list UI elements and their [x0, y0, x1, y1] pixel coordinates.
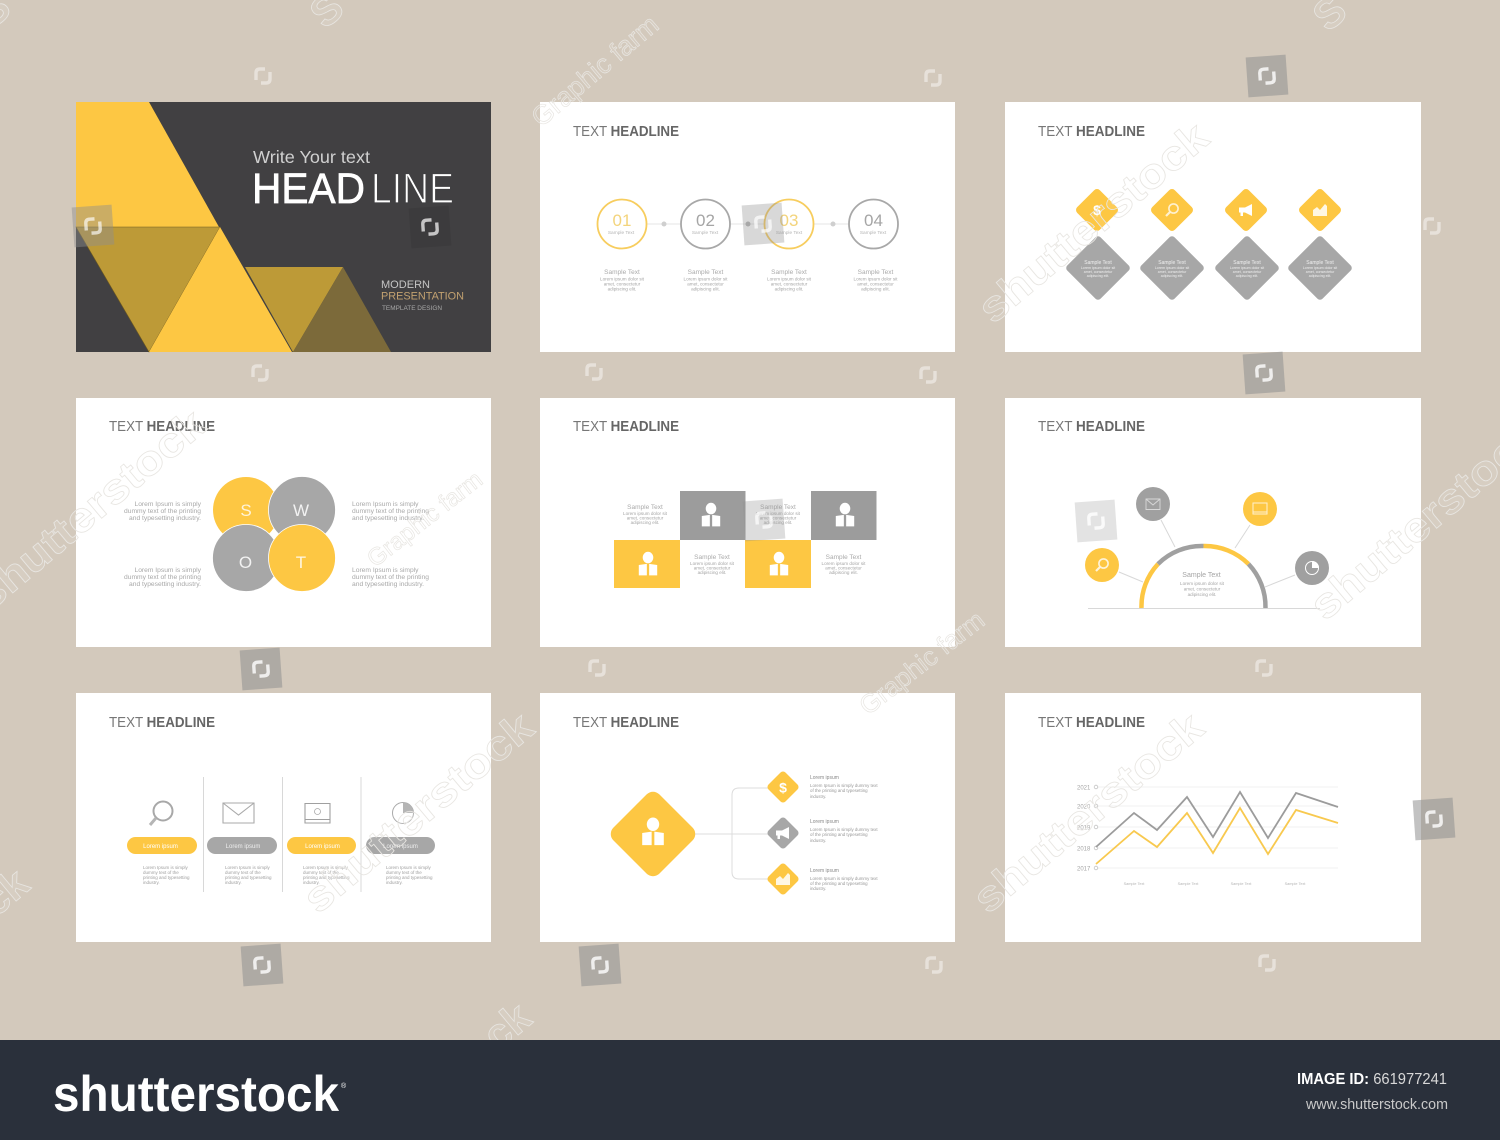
- slide: numbered steps: [540, 102, 955, 352]
- slide: SWOT: [76, 398, 491, 647]
- step 03: adipiscing elit.: [775, 286, 803, 292]
- branch 1: [766, 770, 878, 804]
- column 4: printing and typesetting: [386, 875, 433, 880]
- column 4: industry.: [386, 880, 403, 885]
- image id: IMAGE ID: 661977241: [1297, 1071, 1447, 1088]
- slide: line chart: [1005, 693, 1421, 942]
- icon: mail circle: [1136, 487, 1170, 521]
- caption 3: amet, consectetur: [694, 566, 731, 570]
- line chart: [1077, 785, 1338, 886]
- watermark wordmarks: Graphic farm: [362, 466, 488, 573]
- column 1: Lorem Ipsum is simply: [143, 865, 189, 870]
- caption 4: [822, 554, 866, 575]
- arc text: Lorem ipsum dolor sit: [1180, 581, 1225, 586]
- caption 1: adipiscing elit.: [631, 520, 659, 525]
- caption 1: amet, consectetur: [627, 516, 664, 520]
- cover headline: [252, 165, 454, 213]
- step 02: [681, 200, 730, 292]
- column 1: printing and typesetting: [143, 875, 190, 880]
- line chart: 2017: [1077, 866, 1091, 872]
- column 2: printing and typesetting: [225, 875, 272, 880]
- branch 2: industry.: [810, 838, 826, 843]
- step 02: adipiscing elit.: [691, 286, 720, 292]
- caption 4: adipiscing elit.: [829, 570, 858, 575]
- SWOT text bottom right: [352, 567, 429, 588]
- column 4: Lorem Ipsum is simply: [386, 865, 432, 870]
- branch 2: [766, 816, 878, 850]
- watermark wordmarks: shutterstock: [294, 702, 543, 922]
- watermark wordmarks: ck: [474, 992, 540, 1059]
- slide: cover: [76, 102, 491, 352]
- diamond column 3: adipiscing elit.: [1236, 274, 1258, 278]
- step 01: amet, consectetur: [604, 282, 641, 286]
- main diamond: [607, 788, 699, 880]
- column 3: Lorem ipsum: [305, 844, 340, 850]
- icon: screen circle: [1243, 492, 1277, 526]
- diamond column 2: Lorem ipsum dolor sit: [1155, 266, 1189, 270]
- step 04: Lorem ipsum dolor sit: [854, 276, 898, 282]
- line chart: 2018: [1077, 846, 1091, 852]
- column 2: [207, 803, 277, 885]
- SWOT text top left: Lorem Ipsum is simply: [134, 501, 202, 508]
- column 3: printing and typesetting: [303, 875, 350, 880]
- diamond column 4: [1287, 187, 1353, 301]
- SWOT text bottom right: Lorem Ipsum is simply: [352, 567, 419, 574]
- diamond column 4: Lorem ipsum dolor sit: [1303, 266, 1337, 270]
- diamond column 2: adipiscing elit.: [1161, 274, 1183, 278]
- site url: www.shutterstock.com: [1305, 1097, 1448, 1113]
- connector line with dots: [647, 222, 849, 226]
- column dividers: [204, 777, 361, 892]
- cover tagline: PRESENTATION: [381, 290, 464, 302]
- step 03: Sample Text: [771, 269, 807, 276]
- diamond column 1: Sample Text: [1084, 260, 1112, 266]
- tree connectors: [695, 788, 770, 879]
- step 01: Lorem ipsum dolor sit: [600, 276, 645, 282]
- diamond column 4: adipiscing elit.: [1309, 274, 1331, 278]
- step 02: 02: [696, 211, 715, 230]
- column 3: industry.: [303, 880, 320, 885]
- branch 3: industry.: [810, 886, 826, 891]
- icon: pie circle: [1295, 551, 1329, 585]
- SWOT text top right: Lorem Ipsum is simply: [352, 501, 419, 508]
- step 04: adipiscing elit.: [861, 286, 890, 292]
- columns heading: TEXT HEADLINE: [109, 715, 215, 731]
- cover tagline: [381, 279, 464, 312]
- diamond column 1: $: [1093, 202, 1101, 218]
- diamond column 3: [1214, 187, 1280, 301]
- arc text: Sample Text: [1182, 572, 1221, 579]
- branch 1: Lorem ipsum: [810, 775, 839, 781]
- branch 3: Lorem ipsum: [810, 868, 839, 874]
- column 1: Lorem ipsum: [143, 844, 178, 850]
- steps heading: TEXT HEADLINE: [573, 124, 679, 140]
- branch 2: of the printing and typesetting: [810, 832, 868, 837]
- branch 1: $: [779, 780, 787, 796]
- branch 1: industry.: [810, 794, 826, 799]
- column 2: Lorem Ipsum is simply: [225, 865, 271, 870]
- arc text: adipiscing elit.: [1188, 592, 1216, 597]
- SWOT text bottom left: Lorem Ipsum is simply: [134, 567, 202, 574]
- SWOT circles: [212, 476, 336, 592]
- branch 3: of the printing and typesetting: [810, 881, 868, 886]
- registered mark: ®: [341, 1082, 347, 1090]
- diamond column 3: amet, consectetur: [1233, 270, 1262, 274]
- SWOT heading: TEXT HEADLINE: [109, 419, 215, 435]
- watermark wordmarks: shutterstock: [964, 702, 1213, 922]
- grey block 2: [811, 491, 876, 540]
- SWOT text top left: dummy text of the printing: [124, 508, 201, 515]
- column 1: dummy text of the: [143, 870, 179, 875]
- arc text: amet, consectetur: [1184, 586, 1221, 592]
- caption 4: Lorem ipsum dolor sit: [822, 561, 866, 566]
- step 04: [849, 200, 898, 292]
- branch 1: Lorem Ipsum is simply dummy text: [810, 783, 878, 788]
- cover headline: LINE: [371, 165, 454, 213]
- SWOT circles: W: [293, 501, 309, 520]
- line chart: Sample Text: [1124, 882, 1145, 886]
- step 01: adipiscing elit.: [608, 286, 636, 292]
- icon: search circle: [1085, 548, 1119, 582]
- diamond column 2: Sample Text: [1158, 260, 1186, 266]
- step 03: 03: [780, 211, 798, 230]
- caption 1: [623, 504, 668, 525]
- yellow block 2: [745, 540, 811, 588]
- yellow block 1: [614, 540, 680, 588]
- step 03: amet, consectetur: [771, 282, 808, 286]
- column 4: Lorem ipsum: [383, 844, 418, 850]
- caption 3: adipiscing elit.: [698, 570, 726, 575]
- line chart: Sample Text: [1231, 882, 1252, 886]
- watermark wordmarks: Graphic farm: [853, 605, 990, 721]
- baseline and connectors: [1088, 520, 1320, 608]
- caption 2: Sample Text: [760, 504, 796, 511]
- SWOT text bottom left: dummy text of the printing: [124, 574, 201, 581]
- step 01: 01: [613, 211, 631, 230]
- branch 2: Lorem Ipsum is simply dummy text: [810, 827, 878, 832]
- caption 2: amet, consectetur: [760, 516, 797, 520]
- caption 2: adipiscing elit.: [764, 520, 792, 525]
- step 01: [598, 200, 646, 292]
- watermark logo squares: [72, 55, 1455, 986]
- slide: tree diagram: [540, 693, 955, 942]
- step 02: amet, consectetur: [687, 282, 724, 286]
- branch 3: [766, 862, 878, 896]
- caption 3: Lorem ipsum dolor sit: [690, 561, 735, 566]
- SWOT text bottom left: [124, 567, 202, 588]
- chart heading: TEXT HEADLINE: [1038, 715, 1145, 731]
- diamond column 4: amet, consectetur: [1306, 270, 1335, 274]
- step 04: amet, consectetur: [857, 282, 894, 286]
- caption 2: Lorem ipsum dolor sit: [756, 511, 801, 516]
- diamond column 3: Sample Text: [1233, 260, 1261, 266]
- diamond column 1: amet, consectetur: [1084, 270, 1113, 274]
- column 2: Lorem ipsum: [226, 844, 260, 850]
- slide: people blocks: [540, 398, 955, 647]
- semicircle heading: TEXT HEADLINE: [1038, 419, 1145, 435]
- caption 3: [690, 554, 735, 575]
- cover tagline: TEMPLATE DESIGN: [382, 305, 442, 312]
- diamond column 3: Lorem ipsum dolor sit: [1230, 266, 1264, 270]
- slide: four columns: [76, 693, 491, 942]
- branch 3: Lorem Ipsum is simply dummy text: [810, 876, 878, 881]
- step 01: Sample Text: [604, 269, 640, 276]
- column 1: [127, 802, 197, 885]
- column 3: [287, 804, 356, 885]
- diamond column 4: Sample Text: [1306, 260, 1334, 266]
- branch 2: Lorem ipsum: [810, 819, 839, 825]
- SWOT text bottom right: dummy text of the printing: [352, 574, 429, 581]
- diamond column 1: Lorem ipsum dolor sit: [1081, 266, 1115, 270]
- step 01: Sample Text: [608, 230, 635, 236]
- branch 1: of the printing and typesetting: [810, 788, 868, 793]
- SWOT circles: O: [239, 553, 252, 572]
- diamonds heading: TEXT HEADLINE: [1038, 124, 1145, 140]
- caption 4: amet, consectetur: [825, 566, 862, 570]
- SWOT text top left: and typesetting industry.: [129, 515, 201, 522]
- SWOT text top left: [124, 501, 202, 522]
- step 02: Lorem ipsum dolor sit: [684, 276, 728, 282]
- arc text: [1180, 572, 1225, 597]
- caption 2: [756, 504, 801, 525]
- cover subtitle: Write Your text: [253, 147, 370, 167]
- step 03: [764, 200, 814, 292]
- line chart: 2021: [1077, 786, 1091, 792]
- footer wordmark: shutterstock: [53, 1066, 339, 1122]
- arc segments: [1141, 546, 1266, 608]
- column 3: Lorem Ipsum is simply: [303, 865, 349, 870]
- caption 4: Sample Text: [826, 554, 862, 561]
- step 04: 04: [864, 211, 883, 230]
- diamond column 2: [1139, 187, 1205, 301]
- line chart: Sample Text: [1178, 882, 1199, 886]
- slide: diamonds: [1005, 102, 1421, 352]
- people heading: TEXT HEADLINE: [573, 419, 679, 435]
- step 03: Lorem ipsum dolor sit: [767, 276, 812, 282]
- footer bar: [0, 1040, 1500, 1140]
- column 3: dummy text of the: [303, 870, 339, 875]
- line chart: Sample Text: [1285, 882, 1306, 886]
- watermark wordmarks: shutterstock: [969, 112, 1218, 332]
- SWOT text top right: and typesetting industry.: [352, 515, 424, 522]
- caption 1: Sample Text: [627, 504, 663, 511]
- line chart: 2019: [1077, 826, 1091, 832]
- SWOT circles: S: [240, 501, 252, 520]
- column 2: industry.: [225, 880, 242, 885]
- column 1: industry.: [143, 880, 160, 885]
- line chart: 2020: [1077, 804, 1091, 810]
- step 03: Sample Text: [776, 230, 803, 236]
- SWOT text top right: [352, 501, 429, 522]
- column 4: dummy text of the: [386, 870, 422, 875]
- watermark wordmarks: Graphic farm: [526, 9, 664, 133]
- step 02: Sample Text: [692, 230, 719, 236]
- diamond column 1: adipiscing elit.: [1087, 274, 1109, 278]
- column 2: dummy text of the: [225, 870, 261, 875]
- grey block 1: [680, 491, 746, 540]
- slide: semicircle: [1005, 398, 1421, 647]
- step 04: Sample Text: [860, 230, 887, 236]
- SWOT text bottom right: and typesetting industry.: [352, 581, 424, 588]
- step 04: Sample Text: [858, 269, 894, 276]
- SWOT text top right: dummy text of the printing: [352, 508, 429, 515]
- cover tagline: MODERN: [381, 279, 430, 291]
- diamond column 2: amet, consectetur: [1158, 270, 1187, 274]
- column 4: [366, 802, 435, 885]
- diamond column 1: [1065, 187, 1131, 301]
- tree heading: TEXT HEADLINE: [573, 715, 679, 731]
- SWOT text bottom left: and typesetting industry.: [129, 581, 201, 588]
- SWOT circles: T: [296, 553, 306, 572]
- cover headline: HEAD: [252, 165, 365, 213]
- caption 3: Sample Text: [694, 554, 730, 561]
- step 02: Sample Text: [688, 269, 724, 276]
- caption 1: Lorem ipsum dolor sit: [623, 511, 668, 516]
